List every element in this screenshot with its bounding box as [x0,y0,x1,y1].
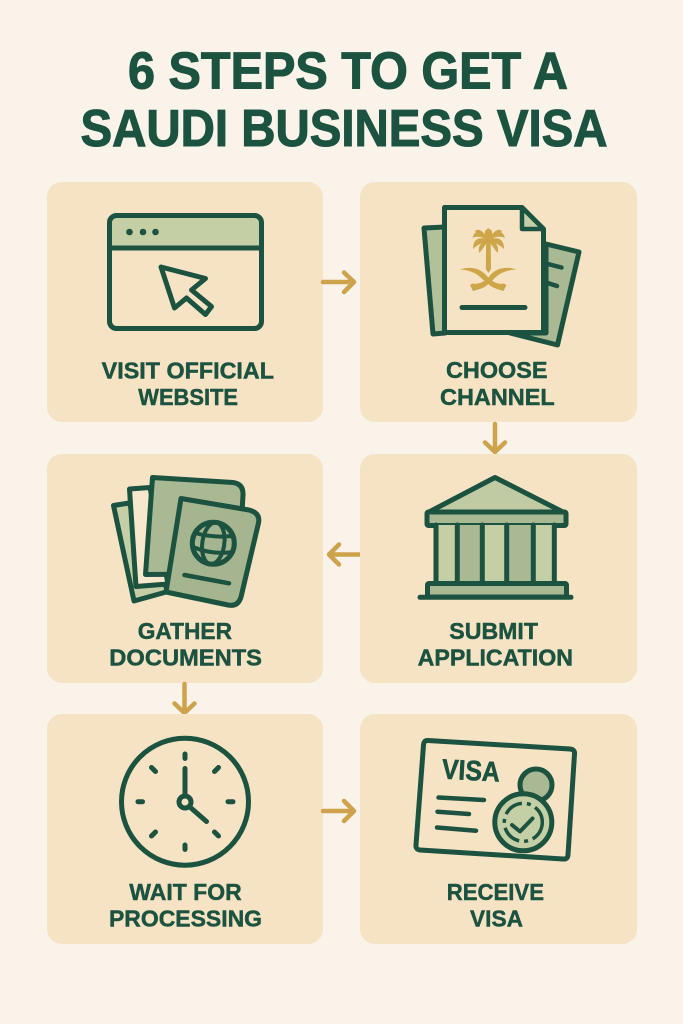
title: SAUDI BUSINESS VISA [80,100,608,158]
label: choose channel [440,357,555,410]
icon: visa card with stamp: VISA [441,754,501,788]
panel: receive visa [360,714,637,944]
label: wait for processing [109,879,262,932]
label: receive visa [447,879,544,932]
label: visit official website: VISIT OFFICIAL [102,357,274,383]
panel: gather documents [47,454,323,683]
title: 6 STEPS TO GET A [128,43,568,101]
label: receive visa: RECEIVE [447,879,544,905]
label: gather documents: DOCUMENTS [109,645,262,671]
label: choose channel: CHOOSE [446,357,548,383]
label: choose channel: CHANNEL [440,384,555,410]
icon: documents with emblem [424,208,579,345]
arrow: step 5 to step 6 [323,801,354,821]
arrow: step 4 to step 3 [329,544,360,564]
panel: wait for processing [47,714,323,944]
label: receive visa: VISA [470,906,523,932]
arrow: step 1 to step 2 [323,272,354,292]
label: submit application [418,618,573,671]
label: wait for processing: WAIT FOR [129,879,242,905]
icon: palm and swords emblem [460,228,516,291]
panel: choose channel [360,182,637,422]
label: submit application: SUBMIT [449,618,538,644]
label: visit official website: WEBSITE [138,384,238,410]
arrow: step 2 to step 4 [485,424,505,452]
label: visit official website [102,357,274,410]
arrow: step 3 to step 5 [174,684,194,713]
icon: visa card with stamp [416,740,575,859]
panel: submit application [360,454,637,683]
icon: passports and papers [114,478,259,605]
icon: government building [420,478,571,597]
panel: visit official website [47,182,323,422]
label: gather documents [109,618,262,671]
title [80,43,608,158]
label: gather documents: GATHER [138,618,232,644]
icon: clock [122,738,248,865]
icon: browser window with cursor [110,216,262,328]
label: wait for processing: PROCESSING [109,906,262,932]
label: submit application: APPLICATION [418,645,573,671]
